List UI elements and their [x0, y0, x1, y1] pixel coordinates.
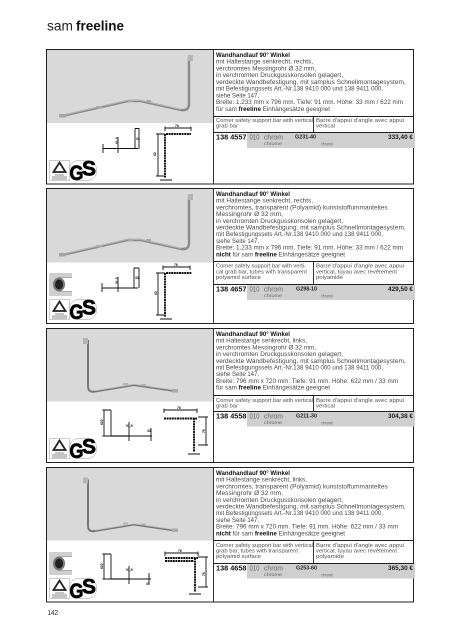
- title: sam freeline: sam: [47, 18, 73, 34]
- description text: [216, 51, 406, 113]
- order row: chrome: [264, 141, 283, 146]
- badge: safety and GS marks: G: [70, 301, 84, 324]
- badge: safety and GS marks: [50, 158, 96, 185]
- translations: grab bar: [216, 124, 238, 130]
- description text: nicht für sam freeline Einhängesätze geeignet: [216, 530, 345, 537]
- badge: safety and GS marks: [50, 436, 96, 463]
- description text: mit Haltestange senkrecht, links,: [216, 477, 307, 484]
- order row: 010: [250, 566, 260, 572]
- order row: 365,30 €: [388, 566, 414, 572]
- description text: verchromtes, transparent (Polyamid) kunststoffummanteltes: [216, 483, 388, 490]
- badge: safety and GS marks: G: [70, 580, 84, 603]
- drawing: side view: 33: [147, 429, 151, 433]
- drawing: top view: 76: [177, 406, 181, 410]
- description text: [216, 330, 406, 392]
- description text: Breite: 1.233 mm x 796 mm. Tiefe: 91 mm. Höhe: 33 mm / 622 mm: [216, 99, 403, 106]
- description text: Messingrohr Ø 32 mm,: [216, 211, 283, 218]
- drawing: side view: [100, 554, 151, 586]
- order row: [216, 132, 415, 148]
- translations: Barre d'appui d'angle avec appui: [316, 398, 404, 404]
- drawing: top view: 76: [178, 549, 182, 553]
- drawing: side view: 622: [100, 419, 104, 425]
- order row: chrom: [264, 566, 283, 572]
- translations: vertical, tuyau avec revêtement: [316, 549, 398, 555]
- drawing: side view: 91,5: [115, 277, 119, 284]
- description text: nicht für sam freeline Einhängesätze geeignet: [216, 251, 345, 258]
- drawing: top view: 76: [174, 263, 178, 267]
- translations: Barre d'appui d'angle avec appui: [316, 118, 404, 124]
- page number: 142: [48, 610, 58, 617]
- badge: safety and GS marks: [50, 296, 96, 324]
- drawing: top view: 76: [202, 572, 206, 576]
- description text: mit Haltestange senkrecht, links,: [216, 338, 307, 345]
- order row: 138 4657: [216, 284, 246, 294]
- translations: Corner safety support bar with verti-: [216, 264, 306, 270]
- translations: Barre d'appui d'angle avec appui: [316, 543, 404, 549]
- order row: 333,40 €: [388, 135, 414, 141]
- translations: grab bar, tubes with transparent: [216, 549, 299, 555]
- description text: Wandhandlauf 90° Winkel: [216, 330, 290, 338]
- drawing: top view: 76: [202, 429, 206, 433]
- photo: grab bar right: [47, 50, 213, 123]
- description text: verchromtes Messingrohr Ø 32 mm,: [216, 65, 316, 72]
- order row: chrom: [264, 286, 283, 294]
- order row: [216, 412, 415, 426]
- translations: Barre d'appui d'angle avec appui: [316, 264, 404, 270]
- order row: 010: [250, 414, 260, 420]
- order row: [216, 564, 415, 578]
- panel: product 138 4657: [46, 188, 415, 324]
- translations: Corner safety support bar with vertical: [216, 118, 313, 124]
- badge: safety and GS marks: [50, 576, 96, 603]
- drawing: side view: [100, 410, 152, 441]
- description text: in verchromten Druckgusskonsolen gelagert,: [216, 218, 343, 225]
- drawing: side view: 91,5: [126, 424, 133, 428]
- drawing: side view: 622: [100, 563, 104, 569]
- translations: polyamid surface: [216, 554, 261, 560]
- order row: 138 4557: [216, 132, 246, 142]
- description text: mit Befestigungssets Art.-Nr.138 9410 000 und 138 9411 000,: [216, 86, 383, 92]
- order row: chrome: [264, 572, 283, 577]
- photo: grab bar right with coating: [47, 189, 213, 262]
- description text: siehe Seite 147,: [216, 238, 259, 245]
- description text: Breite: 796 mm x 720 mm. Tiefe: 91 mm. Höhe: 622 mm / 33 mm: [216, 378, 398, 385]
- badge: safety and GS marks: S: [82, 436, 96, 458]
- translations: cal grab bar, tubes with transparent: [216, 269, 308, 275]
- description text: mit Befestigungssets Art.-Nr.138 9410 000 und 138 9411 000,: [216, 510, 383, 517]
- description text: mit Haltestange senkrecht, rechts,: [216, 59, 313, 66]
- description text: Wandhandlauf 90° Winkel: [216, 51, 290, 59]
- description text: siehe Seite 147,: [216, 371, 259, 378]
- translations: vertical: [316, 124, 335, 130]
- drawing: top view: [164, 406, 208, 454]
- order row: 010: [250, 134, 260, 142]
- icon: coated tube cross-section: [49, 552, 72, 575]
- description text: verchromtes, transparent (Polyamid) kunststoffummanteltes: [216, 204, 388, 211]
- translations: Corner safety support bar with vertical: [216, 398, 313, 404]
- description text: [216, 190, 406, 258]
- drawing: side view: 33: [146, 582, 150, 586]
- description text: Wandhandlauf 90° Winkel: [216, 469, 290, 477]
- drawing: top view: [154, 263, 192, 319]
- order row: G253-60: [296, 566, 317, 572]
- order row: chromé: [321, 572, 333, 578]
- panel: product 138 4558: [46, 328, 415, 463]
- photo: grab bar left: [47, 329, 213, 402]
- description text: in verchromten Druckgusskonsolen gelagert,: [216, 497, 343, 504]
- order row: G298-10: [296, 286, 317, 292]
- drawing: side view: 91,5: [115, 137, 119, 144]
- description text: siehe Seite 147,: [216, 92, 259, 99]
- translations: [216, 118, 404, 130]
- translations: polyamide: [316, 554, 344, 560]
- badge: safety and GS marks: G: [70, 162, 84, 185]
- description text: Breite: 796 mm x 720 mm. Tiefe: 91 mm. Höhe: 622 mm / 33 mm: [216, 524, 398, 531]
- translations: Corner safety support bar with vertical: [216, 543, 313, 549]
- order row: chromé: [321, 142, 333, 146]
- order row: chrome: [264, 293, 283, 298]
- description text: siehe Seite 147,: [216, 517, 259, 524]
- description text: in verchromten Druckgusskonsolen gelagert,: [216, 72, 343, 79]
- description text: für sam freeline Einhängesätze geeignet: [216, 106, 330, 113]
- order row: chromé: [321, 294, 333, 298]
- description text: Wandhandlauf 90° Winkel: [216, 190, 290, 198]
- description text: Breite: 1.233 mm x 796 mm. Tiefe: 91 mm. Höhe: 33 mm / 622 mm: [216, 245, 403, 252]
- description text: [216, 469, 406, 537]
- description text: für sam freeline Einhängesätze geeignet: [216, 385, 330, 392]
- drawing: top view: 76: [175, 124, 179, 128]
- drawing: side view: [102, 268, 139, 292]
- order row: G211-30: [296, 414, 317, 420]
- drawing: top view: [165, 549, 208, 594]
- order row: chrom: [264, 414, 283, 420]
- order row: chrome: [264, 420, 283, 425]
- translations: vertical: [316, 404, 335, 410]
- order row: 304,38 €: [388, 414, 414, 420]
- translations: vertical, tuyau avec revêtement: [316, 269, 398, 275]
- translations: [216, 264, 404, 281]
- order row: G231-40: [295, 134, 316, 140]
- description text: verdeckte Wandbefestigung, mit samplus Schnellmontagesystem,: [216, 358, 406, 365]
- order row: chrom: [264, 134, 283, 142]
- title: sam freeline: freeline: [76, 18, 124, 34]
- description text: Messingrohr Ø 32 mm,: [216, 490, 283, 497]
- title: sam freeline: [47, 18, 124, 34]
- translations: [216, 398, 404, 410]
- description text: mit Befestigungssets Art.-Nr.138 9410 000 und 138 9411 000,: [216, 364, 383, 372]
- description text: verdeckte Wandbefestigung, mit samplus Schnellmontagesystem,: [216, 224, 406, 232]
- drawing: side view: 33: [135, 276, 139, 280]
- description text: verdeckte Wandbefestigung, mit samplus Schnellmontagesystem,: [216, 79, 406, 86]
- description text: in verchromten Druckgusskonsolen gelagert,: [216, 351, 343, 358]
- badge: safety and GS marks: S: [82, 576, 96, 598]
- drawing: top view: 62: [153, 152, 157, 156]
- translations: polyamide: [316, 275, 343, 281]
- order row: chromé: [321, 420, 333, 426]
- drawing: side view: [103, 128, 140, 153]
- translations: polyamid surface: [216, 275, 261, 281]
- panel: product 138 4658: [46, 468, 415, 603]
- drawing: top view: [153, 124, 191, 180]
- description text: verdeckte Wandbefestigung, mit samplus Schnellmontagesystem,: [216, 504, 406, 510]
- drawing: side view: 91,5: [126, 568, 133, 572]
- translations: [216, 543, 404, 560]
- photo: grab bar left with coating: [47, 468, 213, 540]
- description text: mit Befestigungssets Art.-Nr.138 9410 000 und 138 9411 000,: [216, 231, 383, 238]
- badge: safety and GS marks: S: [82, 296, 96, 320]
- order row: 138 4558: [216, 412, 246, 420]
- drawing: top view: 62: [154, 291, 158, 295]
- badge: safety and GS marks: G: [70, 440, 84, 463]
- order row: 138 4658: [216, 564, 246, 572]
- description text: verchromtes Messingrohr Ø 32 mm,: [216, 344, 316, 351]
- order row: [216, 284, 415, 300]
- panel: product 138 4557: [46, 50, 415, 185]
- order row: 010: [250, 286, 260, 294]
- description text: mit Haltestange senkrecht, rechts,: [216, 198, 313, 205]
- badge: safety and GS marks: S: [82, 158, 96, 180]
- order row: 429,50 €: [388, 287, 414, 293]
- drawing: side view: 33: [136, 137, 140, 141]
- translations: grab bar: [216, 404, 238, 410]
- icon: coated tube cross-section: [49, 273, 72, 296]
